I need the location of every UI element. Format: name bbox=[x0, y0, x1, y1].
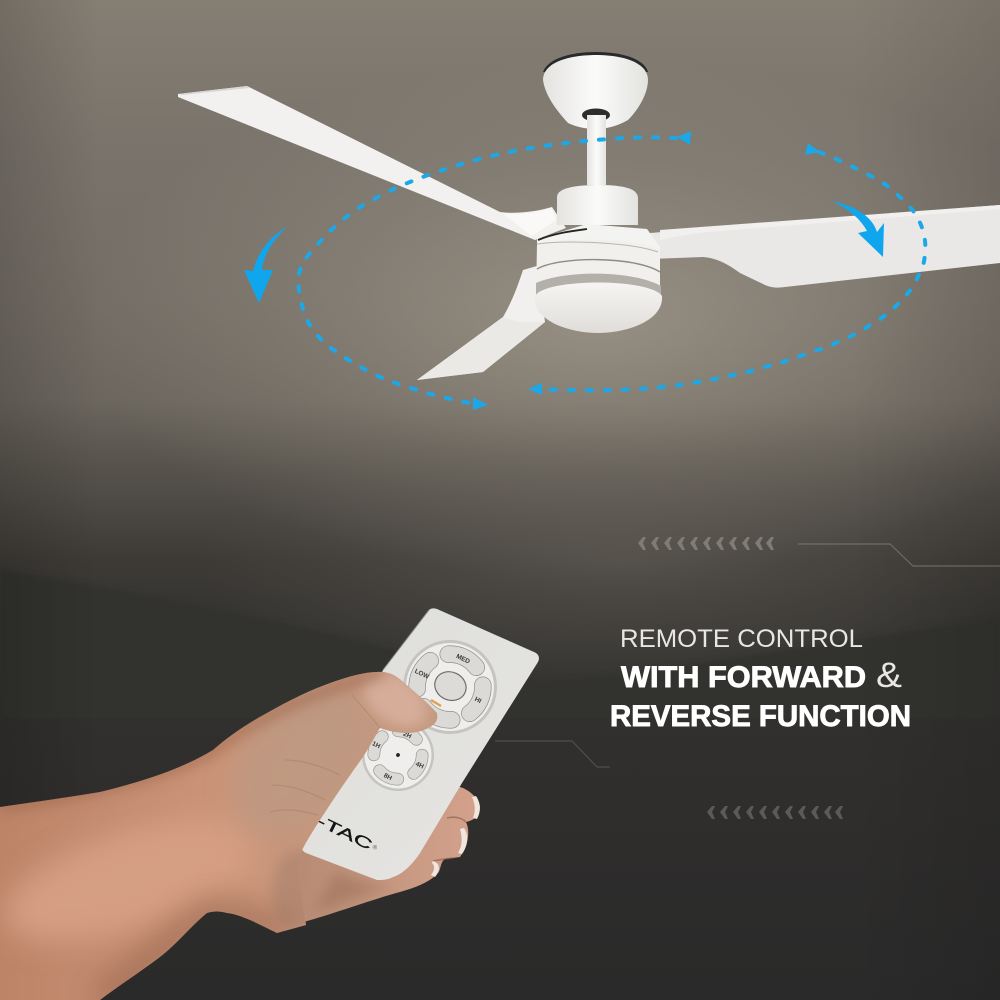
fan vent rings bbox=[536, 239, 661, 296]
dashed arrow: right to bottom bbox=[542, 152, 925, 390]
large curved arrow: left bbox=[244, 227, 287, 303]
fan light dome bbox=[535, 282, 662, 333]
ceiling fan bbox=[178, 52, 1000, 380]
fan down rod bbox=[587, 115, 606, 185]
button label: HI: HI bbox=[473, 696, 482, 705]
remote main button cluster bbox=[388, 625, 512, 749]
headline: remote control: REMOTE CONTROL bbox=[620, 625, 863, 653]
button label: 2H: 2H bbox=[402, 731, 413, 741]
fan motor housing bbox=[557, 185, 638, 225]
hand holding remote bbox=[0, 608, 539, 1000]
arrowhead: bottom bbox=[473, 397, 488, 410]
arrowhead: bottom centre bbox=[528, 383, 542, 395]
fan blade: lower left bbox=[417, 266, 545, 380]
headline text bbox=[610, 625, 911, 733]
remote timer button cluster bbox=[350, 707, 446, 803]
button label: MED: MED bbox=[455, 653, 471, 666]
button label: 8H: 8H bbox=[382, 772, 393, 782]
fingernails bbox=[431, 796, 480, 877]
fan collar bbox=[537, 224, 660, 262]
large curved arrow: right bbox=[832, 201, 884, 257]
chevron row: lower bbox=[707, 806, 843, 819]
rotation arrows bbox=[244, 131, 925, 410]
fan blade: right bbox=[650, 205, 1000, 288]
headline: reverse function: REVERSE FUNCTION bbox=[610, 700, 911, 733]
button label: LOW: LOW bbox=[413, 668, 431, 681]
fan blade: upper left bbox=[178, 86, 566, 240]
remote logo: V-TAC bbox=[299, 805, 375, 854]
remote control bbox=[299, 608, 539, 880]
remote registered mark: ® bbox=[371, 844, 379, 852]
orange button marking bbox=[431, 700, 441, 706]
headline: ampersand: & bbox=[876, 656, 902, 695]
dashed arrow: top and left to bottom bbox=[298, 137, 676, 404]
headline: with forward: WITH FORWARD bbox=[621, 661, 866, 694]
fan ceiling canopy bbox=[543, 52, 648, 129]
button label: 1H: 1H bbox=[371, 740, 382, 750]
fingers and lower palm behind remote bbox=[250, 786, 480, 933]
arm, palm and thumb over remote bbox=[0, 659, 450, 1000]
button label: 4H: 4H bbox=[414, 761, 425, 771]
circuit line: beside remote bbox=[495, 741, 610, 767]
circuit line: upper right bbox=[798, 544, 1000, 566]
arrowhead: top bbox=[677, 131, 691, 145]
arrowhead: top right bbox=[805, 143, 820, 155]
chevron row: upper bbox=[638, 537, 774, 550]
